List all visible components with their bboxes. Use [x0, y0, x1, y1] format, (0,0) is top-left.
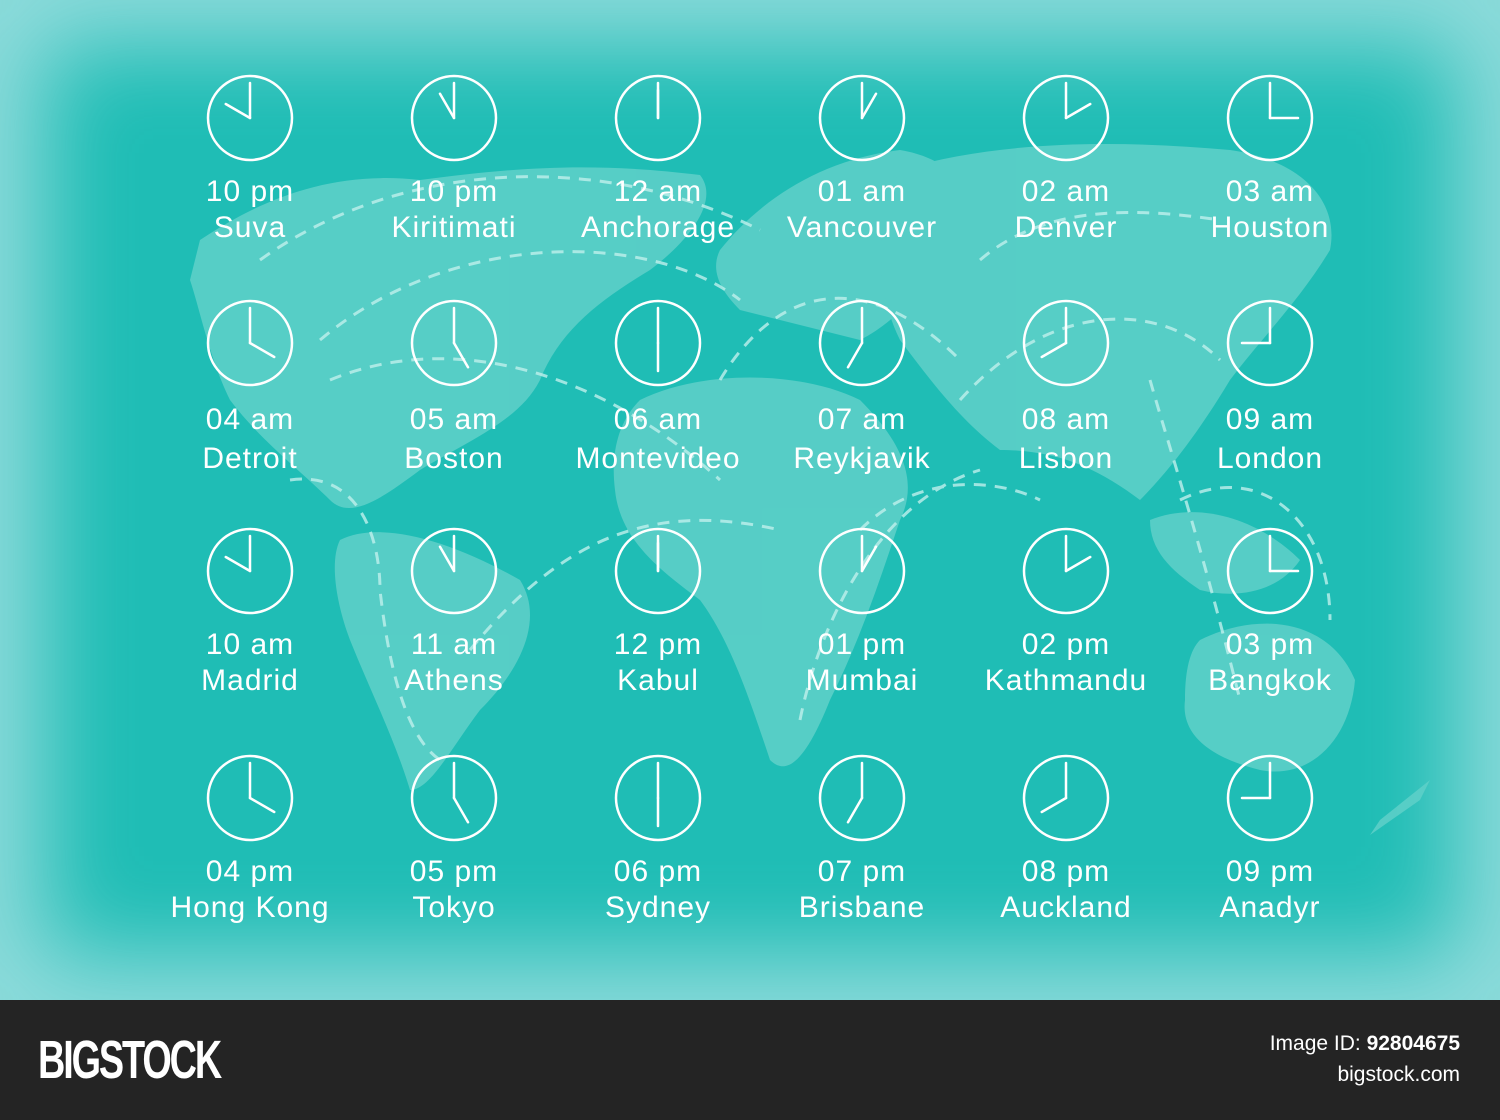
clock: Houston: [1228, 76, 1312, 160]
clock: Madrid: [208, 529, 292, 613]
label: London: [1217, 403, 1323, 475]
label: Mumbai: [806, 628, 918, 697]
clock: Anchorage: [616, 76, 700, 160]
label: Hong Kong: Hong Kong: [170, 891, 330, 924]
label: Anadyr: [1219, 855, 1321, 924]
clock: Vancouver: [820, 76, 904, 160]
label: Suva: 10 pm: [206, 175, 294, 208]
label: Denver: Denver: [1015, 211, 1117, 244]
label: Auckland: [1000, 855, 1132, 924]
label: Anchorage: 12 am: [614, 175, 702, 208]
label: Madrid: [201, 628, 299, 697]
label: Reykjavik: [793, 403, 931, 475]
label: Hong Kong: [170, 855, 330, 924]
label: Anchorage: [581, 175, 735, 244]
label: Kathmandu: [985, 628, 1147, 697]
label: Lisbon: 08 am: [1022, 403, 1110, 436]
footer bar: [0, 1000, 1500, 1120]
label: Detroit: 04 am: [206, 403, 294, 436]
label: Sydney: 06 pm: [614, 855, 702, 888]
label: Lisbon: Lisbon: [1019, 442, 1113, 475]
label: Denver: [1015, 175, 1117, 244]
label: Madrid: Madrid: [201, 664, 299, 697]
clock: Bangkok: [1228, 529, 1312, 613]
label: Boston: 05 am: [410, 403, 498, 436]
label: Kathmandu: 02 pm: [1022, 628, 1110, 661]
label: Kiritimati: [391, 175, 516, 244]
clock: Suva: [208, 76, 292, 160]
clock: Anadyr: [1228, 756, 1312, 840]
label: Tokyo: [410, 855, 498, 924]
label: Athens: [404, 628, 504, 697]
label: Anadyr: Anadyr: [1219, 891, 1321, 924]
label: Brisbane: [799, 855, 925, 924]
label: Boston: [404, 403, 504, 475]
image id: Image ID: 92804675: [1270, 1032, 1460, 1055]
label: Kabul: Kabul: [617, 664, 699, 697]
clock: Hong Kong: [208, 756, 292, 840]
clock: Reykjavik: [820, 301, 904, 385]
label: Detroit: [202, 403, 298, 475]
label: Anchorage: Anchorage: [581, 211, 735, 244]
clock: Sydney: [616, 756, 700, 840]
label: Auckland: Auckland: [1000, 891, 1132, 924]
label: Vancouver: 01 am: [818, 175, 906, 208]
label: Kathmandu: Kathmandu: [985, 664, 1147, 697]
label: Hong Kong: 04 pm: [206, 855, 294, 888]
clock: Detroit: [208, 301, 292, 385]
label: Vancouver: [787, 175, 937, 244]
label: Montevideo: [575, 403, 741, 475]
clock: Lisbon: [1024, 301, 1108, 385]
label: Houston: 03 am: [1226, 175, 1314, 208]
label: Bangkok: Bangkok: [1208, 664, 1332, 697]
label: Houston: Houston: [1211, 211, 1329, 244]
label: Kiritimati: Kiritimati: [391, 211, 516, 244]
label: Brisbane: 07 pm: [818, 855, 906, 888]
label: London: 09 am: [1226, 403, 1314, 436]
clock: Auckland: [1024, 756, 1108, 840]
label: Athens: Athens: [404, 664, 504, 697]
clock: London: [1228, 301, 1312, 385]
label: Bangkok: [1208, 628, 1332, 697]
label: Boston: Boston: [404, 442, 504, 475]
clock: Athens: [412, 529, 496, 613]
logo: BIGSTOCK: [38, 1030, 220, 1090]
image id: [1270, 1032, 1460, 1086]
label: Houston: [1211, 175, 1329, 244]
clock: Kathmandu: [1024, 529, 1108, 613]
label: Brisbane: Brisbane: [799, 891, 925, 924]
label: Mumbai: Mumbai: [806, 664, 918, 697]
clock: Denver: [1024, 76, 1108, 160]
label: Reykjavik: Reykjavik: [793, 442, 931, 475]
clock: Montevideo: [616, 301, 700, 385]
label: Denver: 02 am: [1022, 175, 1110, 208]
label: Sydney: [605, 855, 711, 924]
label: Detroit: Detroit: [202, 442, 298, 475]
label: Anadyr: 09 pm: [1226, 855, 1314, 888]
label: Auckland: 08 pm: [1022, 855, 1110, 888]
label: Vancouver: Vancouver: [787, 211, 937, 244]
clock: Kiritimati: [412, 76, 496, 160]
label: Athens: 11 am: [411, 628, 497, 661]
label: Suva: Suva: [214, 211, 286, 244]
clock: Tokyo: [412, 756, 496, 840]
label: Montevideo: Montevideo: [575, 442, 741, 475]
label: Bangkok: 03 pm: [1226, 628, 1314, 661]
label: Tokyo: Tokyo: [412, 891, 496, 924]
label: Madrid: 10 am: [206, 628, 294, 661]
label: Kabul: 12 pm: [614, 628, 702, 661]
label: London: London: [1217, 442, 1323, 475]
label: Montevideo: 06 am: [614, 403, 702, 436]
label: Tokyo: 05 pm: [410, 855, 498, 888]
label: Lisbon: [1019, 403, 1113, 475]
clock: Boston: [412, 301, 496, 385]
clock: Brisbane: [820, 756, 904, 840]
label: Kiritimati: 10 pm: [410, 175, 498, 208]
clock: Mumbai: [820, 529, 904, 613]
label: Kabul: [614, 628, 702, 697]
label: Sydney: Sydney: [605, 891, 711, 924]
clock: Kabul: [616, 529, 700, 613]
label: Reykjavik: 07 am: [818, 403, 906, 436]
label: Suva: [206, 175, 294, 244]
image id: bigstock.com: [1337, 1063, 1460, 1086]
label: Mumbai: 01 pm: [818, 628, 906, 661]
